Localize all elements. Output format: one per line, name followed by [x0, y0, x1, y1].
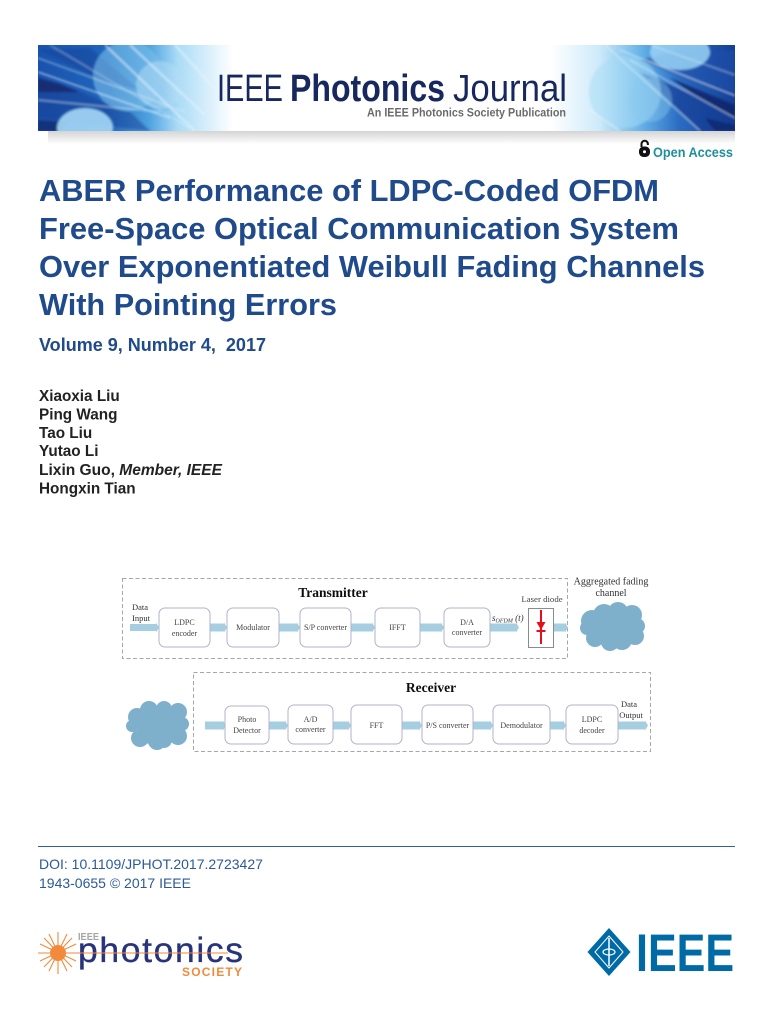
DOI and ISSN: DOI: 10.1109/JPHOT.2017.2723427 — [39, 856, 263, 872]
author list: Yutao Li — [39, 443, 98, 460]
divider rule — [38, 846, 735, 847]
DOI and ISSN: 1943-0655 © 2017 IEEE — [39, 875, 191, 891]
author list: Lixin Guo, Member, IEEE — [39, 462, 223, 479]
label: aggregated fading channel — [574, 576, 648, 599]
wordmark society: SOCIETY — [182, 965, 242, 979]
receiver block labels: FFT — [370, 721, 384, 730]
open access badge — [639, 141, 733, 160]
data output label: Data — [621, 699, 637, 709]
transmitter block labels: D/A — [460, 618, 474, 627]
icon: laser diode — [528, 608, 554, 648]
article title: Free-Space Optical Communication System — [39, 212, 679, 246]
volume and issue: Volume 9, Number 4, 2017 — [39, 334, 266, 355]
author list: Ping Wang — [39, 406, 117, 424]
article title — [39, 174, 705, 322]
article title: With Pointing Errors — [39, 288, 337, 322]
author list: Tao Liu — [39, 425, 92, 442]
receiver arrows — [205, 720, 648, 730]
article title: ABER Performance of LDPC-Coded OFDM — [39, 174, 659, 208]
receiver blocks — [225, 705, 618, 744]
transmitter block labels: S/P converter — [304, 623, 347, 632]
wordmark IEEE: IEEE — [78, 932, 99, 943]
heading: transmitter: Transmitter — [298, 585, 368, 600]
receiver block labels: Detector — [233, 726, 261, 735]
panel: receiver — [194, 672, 650, 752]
author list: Xiaoxia Liu — [39, 388, 120, 405]
label: aggregated fading channel: channel — [595, 588, 627, 599]
logo: IEEE — [588, 924, 734, 983]
receiver block labels: converter — [295, 725, 326, 734]
logo: IEEE Photonics Society — [38, 930, 243, 979]
transmitter block labels: LDPC — [174, 618, 195, 627]
receiver block labels: Demodulator — [500, 721, 543, 730]
transmitter block labels: encoder — [172, 629, 197, 638]
open access badge: Open Access — [653, 145, 733, 160]
data input label: Data — [132, 602, 148, 612]
author list: Hongxin Tian — [39, 480, 136, 498]
banner title: Photonics — [290, 68, 445, 110]
wordmark IEEE: IEEE — [636, 924, 734, 983]
laser diode label: Laser diode — [521, 594, 563, 604]
label: aggregated fading channel: Aggregated fading — [574, 576, 648, 588]
transmitter block labels: converter — [452, 628, 482, 637]
banner title — [217, 68, 567, 110]
transmitter block labels: Modulator — [236, 623, 270, 632]
signal label: s — [492, 613, 496, 623]
icon: IEEE diamond — [588, 928, 630, 976]
receiver block labels: decoder — [579, 726, 605, 735]
data output label: Output — [619, 710, 643, 720]
icon: orange starburst — [38, 932, 228, 974]
receiver block labels — [233, 715, 605, 735]
banner title: Journal — [453, 68, 567, 110]
heading: receiver: Receiver — [406, 680, 456, 695]
wordmark photonics: photonics — [78, 930, 243, 970]
banner subtitle: An IEEE Photonics Society Publication — [367, 108, 566, 120]
transmitter arrows — [130, 622, 568, 632]
banner title: IEEE — [217, 68, 283, 110]
data input label: Input — [132, 613, 151, 623]
signal label: OFDM — [496, 618, 514, 624]
system block diagram — [122, 576, 650, 752]
icon: open padlock — [639, 141, 650, 157]
receiver block labels: P/S converter — [426, 721, 469, 730]
transmitter block labels — [172, 618, 482, 638]
receiver block labels: A/D — [304, 715, 318, 724]
article title: Over Exponentiated Weibull Fading Channels — [39, 250, 705, 284]
receiver block labels: Photo — [238, 715, 256, 724]
data input label — [132, 602, 151, 623]
DOI and ISSN — [39, 856, 263, 891]
data output label — [619, 699, 643, 720]
transmitter blocks — [159, 608, 490, 647]
signal label: (t) — [513, 613, 524, 623]
banner: IEEE Photonics Journal — [38, 45, 735, 142]
receiver block labels: LDPC — [582, 715, 602, 724]
icon: channel cloud top — [580, 602, 645, 651]
transmitter block labels: IFFT — [389, 623, 406, 632]
icon: channel cloud bottom — [126, 701, 189, 750]
author list — [39, 388, 223, 498]
panel: transmitter — [122, 578, 568, 658]
